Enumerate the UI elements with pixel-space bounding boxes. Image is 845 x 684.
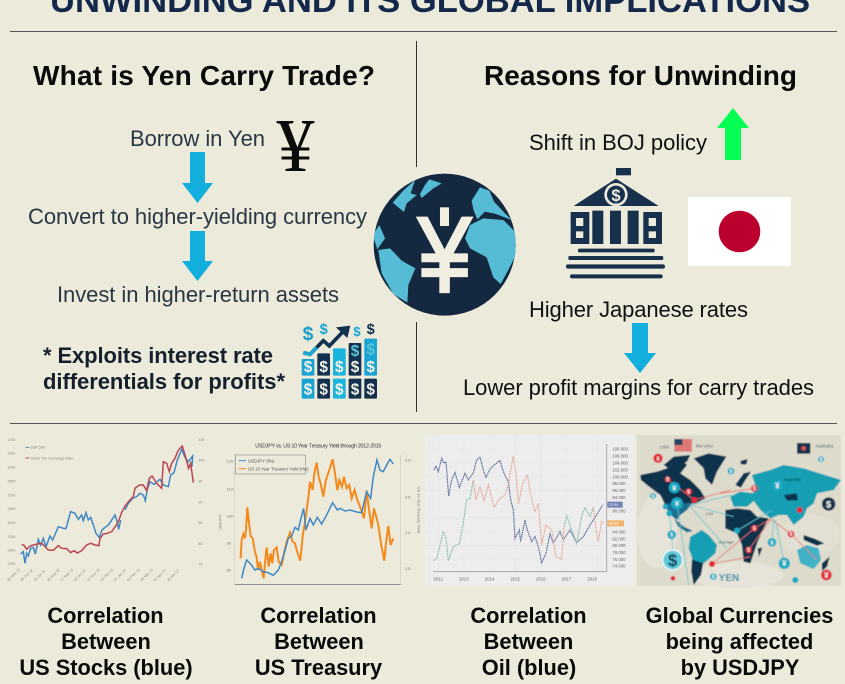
- map markers: $: [712, 575, 715, 581]
- map flags and legend: Australia: [784, 477, 801, 482]
- icon: dollar bars with rising arrow: $: [319, 381, 328, 398]
- icon: dollar bars with rising arrow: $: [304, 359, 313, 376]
- icon: dollar bars with rising arrow: [302, 322, 377, 399]
- icon: central bank building: [566, 168, 665, 278]
- chart: USDJPY vs US Treasury yield: [217, 443, 421, 584]
- text: Higher Japanese rates: Higher Japanese rates: [529, 297, 748, 322]
- text: Shift in BOJ policy: Shift in BOJ policy: [529, 130, 707, 155]
- map markers: $: [730, 469, 733, 475]
- caption: chart 4: being affected: [666, 629, 813, 654]
- chart: S&P 500 vs dollar: 95: [198, 480, 202, 484]
- caption: chart 2: Correlation: [260, 603, 377, 628]
- map flags and legend: Average: [719, 540, 734, 545]
- chart: USDJPY vs US Treasury yield: US 10 Year Treasury Yield: [416, 487, 421, 533]
- caption: chart 1: Between: [61, 629, 151, 654]
- chart: USDJPY vs US Treasury yield: USDJPY vs. US 10 Year Treasury Yield through 2012-2015: [255, 443, 381, 449]
- map markers: ¥: [824, 571, 829, 580]
- chart: S&P 500 vs dollar: [6, 438, 204, 582]
- caption: chart 3: Oil (blue): [482, 655, 576, 680]
- chart: oil vs USDJPY candlesticks: 2017: [562, 576, 572, 581]
- map markers: $: [666, 477, 669, 483]
- chart: S&P 500 vs dollar: 25 Jun 12: [20, 568, 34, 582]
- map markers: ¥: [675, 499, 680, 508]
- text: Convert to higher-yielding currency: Convert to higher-yielding currency: [28, 204, 367, 229]
- chart: USDJPY vs US Treasury yield: 90: [227, 541, 232, 546]
- chart: S&P 500 vs dollar: 1350: [7, 535, 15, 539]
- chart: S&P 500 vs dollar: 04 Feb 13: [126, 568, 141, 582]
- chart: S&P 500 vs dollar: 1550: [7, 479, 15, 483]
- chart: oil vs USDJPY candlesticks: 76.000: [612, 557, 626, 562]
- icon: dollar bars with rising arrow: $: [367, 322, 375, 338]
- chart: oil vs USDJPY candlesticks: 2015: [510, 576, 521, 581]
- caption: chart 4: Global Currencies: [646, 603, 833, 628]
- map markers: $: [771, 540, 774, 546]
- arrow: borrow to convert: [182, 152, 213, 203]
- map flags and legend: USA: [705, 511, 714, 516]
- caption: chart 1: Correlation: [47, 603, 164, 628]
- map markers: $: [819, 457, 822, 463]
- chart: oil vs USDJPY candlesticks: 80.000: [612, 543, 626, 548]
- heading: What is Yen Carry Trade: What is Yen Carry Trade?: [33, 60, 375, 91]
- chart: oil vs USDJPY candlesticks: 102.000: [612, 467, 629, 472]
- map flags and legend: USA: [660, 444, 670, 449]
- icon: dollar bars with rising arrow: $: [366, 381, 375, 398]
- icon: dollar bars with rising arrow: $: [304, 381, 313, 398]
- chart: oil vs USDJPY candlesticks: 84.000: [612, 529, 626, 534]
- icon: dollar bars with rising arrow: $: [351, 359, 360, 376]
- chart: S&P 500 vs dollar: 1450: [7, 507, 15, 511]
- chart: USDJPY vs US Treasury yield: 120: [227, 459, 234, 464]
- map markers: $: [657, 456, 660, 462]
- caption: chart 2: Between: [274, 629, 364, 654]
- icon: globe with yen: [373, 174, 517, 316]
- chart: oil vs USDJPY candlesticks: 96.000: [612, 488, 626, 493]
- chart: S&P 500 vs dollar: S&P 500: [31, 446, 45, 450]
- chart: S&P 500 vs dollar: 105: [198, 438, 204, 442]
- chart: USDJPY vs US Treasury yield: 80: [227, 567, 232, 572]
- chart: USDJPY vs US Treasury yield: 110: [227, 487, 234, 492]
- chart: S&P 500 vs dollar: 29 Apr 13: [166, 568, 180, 582]
- map markers: $: [753, 486, 756, 492]
- map markers: $: [668, 551, 678, 570]
- chart: S&P 500 vs dollar: 20 Aug 12: [46, 568, 61, 582]
- icon: globe with yen: ¥: [417, 195, 472, 315]
- map flags and legend: [660, 439, 834, 545]
- chart: USDJPY vs US Treasury yield: USDJPY (lhs): [248, 459, 275, 464]
- chart: USDJPY vs US Treasury yield: 100: [227, 513, 234, 518]
- chart: USDJPY vs US Treasury yield: 2.5: [405, 494, 411, 499]
- chart: USDJPY vs US Treasury yield: 2.0: [405, 530, 411, 535]
- chart: oil vs USDJPY candlesticks: 86.86: [609, 521, 619, 526]
- map markers: $: [747, 548, 750, 554]
- caption: chart 1: US Stocks (blue): [19, 655, 193, 680]
- icon: dollar bars with rising arrow: $: [303, 324, 314, 345]
- chart: S&P 500 vs dollar: 07 Jan 13: [113, 568, 127, 582]
- chart: S&P 500 vs dollar: 04 Mar 13: [140, 568, 154, 582]
- chart: oil vs USDJPY candlesticks: 100.000: [612, 474, 629, 479]
- map markers: [650, 454, 835, 583]
- chart: S&P 500 vs dollar: 1700: [7, 438, 15, 442]
- caption: chart 3: Between: [484, 629, 573, 654]
- icon: dollar bars with rising arrow: $: [335, 359, 344, 376]
- map flags and legend: the USA: [696, 444, 714, 449]
- chart: oil vs USDJPY candlesticks: 78.000: [612, 550, 626, 555]
- arrow: green up: [717, 108, 749, 160]
- chart: oil vs USDJPY candlesticks: 90.000: [612, 509, 626, 514]
- map markers: $: [687, 489, 690, 495]
- icon: dollar bars with rising arrow: $: [335, 381, 344, 398]
- chart: oil vs USDJPY candlesticks: 94.000: [612, 495, 626, 500]
- illustration: world map of currencies: [637, 435, 841, 588]
- chart: oil vs USDJPY candlesticks: 2018: [587, 576, 598, 581]
- chart: S&P 500 vs dollar: 75: [198, 563, 202, 567]
- heading: Reasons for Unwinding: Reasons for Unwinding: [484, 60, 797, 91]
- chart: S&P 500 vs dollar: 10 Dec 12: [100, 568, 114, 582]
- map markers: $: [753, 526, 756, 532]
- chart: USDJPY vs US Treasury yield: 1.5: [405, 566, 411, 571]
- text: Borrow in Yen: Borrow in Yen: [130, 126, 265, 151]
- icon: dollar bars with rising arrow: $: [319, 359, 328, 376]
- chart: S&P 500 vs dollar: 17 Sep 12: [60, 568, 74, 582]
- chart: S&P 500 vs dollar: 80: [198, 542, 202, 546]
- chart: S&P 500 vs dollar: 1300: [7, 549, 15, 553]
- map markers: $: [670, 533, 673, 539]
- chart: oil vs USDJPY candlesticks: 82.000: [612, 536, 626, 541]
- icon: dollar bars with rising arrow: $: [320, 322, 328, 338]
- map flags and legend: Australia: [815, 444, 834, 449]
- chart: oil vs USDJPY candlesticks: 2012: [433, 576, 444, 581]
- chart: S&P 500 vs dollar: 28 May 12: [6, 567, 21, 582]
- icon: dollar bars with rising arrow: $: [351, 343, 360, 360]
- chart: S&P 500 vs dollar: 1600: [7, 466, 15, 470]
- chart: S&P 500 vs dollar: 1500: [7, 493, 15, 497]
- map markers: $: [826, 499, 832, 509]
- illustration: world map of currencies: YEN: [719, 573, 739, 584]
- icon: central bank building: $: [611, 186, 621, 205]
- text: exploits interest rate differentials: differentials for profits*: [43, 369, 285, 394]
- chart: oil vs USDJPY candlesticks: [425, 435, 635, 586]
- chart: S&P 500 vs dollar: 1250: [7, 562, 15, 566]
- chart: oil vs USDJPY candlesticks: 108.000: [612, 447, 629, 452]
- chart: USDJPY vs US Treasury yield: US 10 Year Treasury Yield (rhs): [248, 466, 309, 471]
- chart: oil vs USDJPY candlesticks: 106.000: [612, 454, 629, 459]
- icon: dollar bars with rising arrow: $: [366, 342, 375, 359]
- chart: S&P 500 vs dollar: 100: [198, 459, 204, 463]
- chart: oil vs USDJPY candlesticks: 98.000: [612, 481, 626, 486]
- chart: oil vs USDJPY candlesticks: 2013: [459, 576, 469, 581]
- icon: dollar bars with rising arrow: $: [366, 359, 375, 376]
- text: exploits interest rate differentials: * Exploits interest rate: [43, 343, 273, 368]
- icon: dollar bars with rising arrow: $: [353, 324, 361, 339]
- chart: S&P 500 vs dollar: 23 Jul 12: [33, 569, 46, 582]
- chart: oil vs USDJPY candlesticks: 72.91: [609, 502, 619, 507]
- map markers: ¥: [782, 559, 787, 568]
- chart: oil vs USDJPY candlesticks: 2016: [536, 576, 546, 581]
- chart: S&P 500 vs dollar: 1400: [7, 521, 15, 525]
- map markers: ¥: [775, 482, 780, 491]
- chart: USDJPY vs US Treasury yield: USDJPY: [217, 514, 222, 530]
- chart: oil vs USDJPY candlesticks: 74.000: [612, 564, 626, 569]
- text: Invest in higher-return assets: Invest in higher-return assets: [57, 282, 339, 307]
- chart: S&P 500 vs dollar: 01 Apr 13: [153, 568, 167, 582]
- caption: chart 2: US Treasury: [255, 655, 382, 680]
- chart: S&P 500 vs dollar: Dollar Yen Exchange Rate: [31, 456, 73, 460]
- map markers: $: [652, 494, 655, 500]
- chart: S&P 500 vs dollar: 1650: [7, 451, 15, 455]
- icon: yen symbol: ¥: [276, 104, 314, 188]
- chart: USDJPY vs US Treasury yield: 3.0: [405, 458, 411, 463]
- arrow: rates to margins: [624, 323, 656, 373]
- icon: dollar bars with rising arrow: $: [351, 381, 360, 398]
- chart: oil vs USDJPY candlesticks: 2014: [485, 576, 495, 581]
- chart: S&P 500 vs dollar: 12 Nov 12: [86, 568, 101, 582]
- map markers: ¥: [672, 483, 677, 492]
- caption: chart 3: Correlation: [470, 603, 587, 628]
- chart: oil vs USDJPY candlesticks: 104.000: [612, 460, 629, 465]
- icon: flag of Japan: [688, 197, 791, 266]
- arrow: convert to invest: [182, 231, 213, 281]
- chart: S&P 500 vs dollar: 15 Oct 12: [73, 568, 87, 582]
- text: Lower profit margins: Lower profit margins for carry trades: [463, 375, 814, 400]
- caption: chart 4: by USDJPY: [681, 655, 800, 680]
- map markers: $: [790, 532, 793, 538]
- chart: S&P 500 vs dollar: 90: [198, 500, 202, 504]
- chart: S&P 500 vs dollar: 85: [198, 521, 202, 525]
